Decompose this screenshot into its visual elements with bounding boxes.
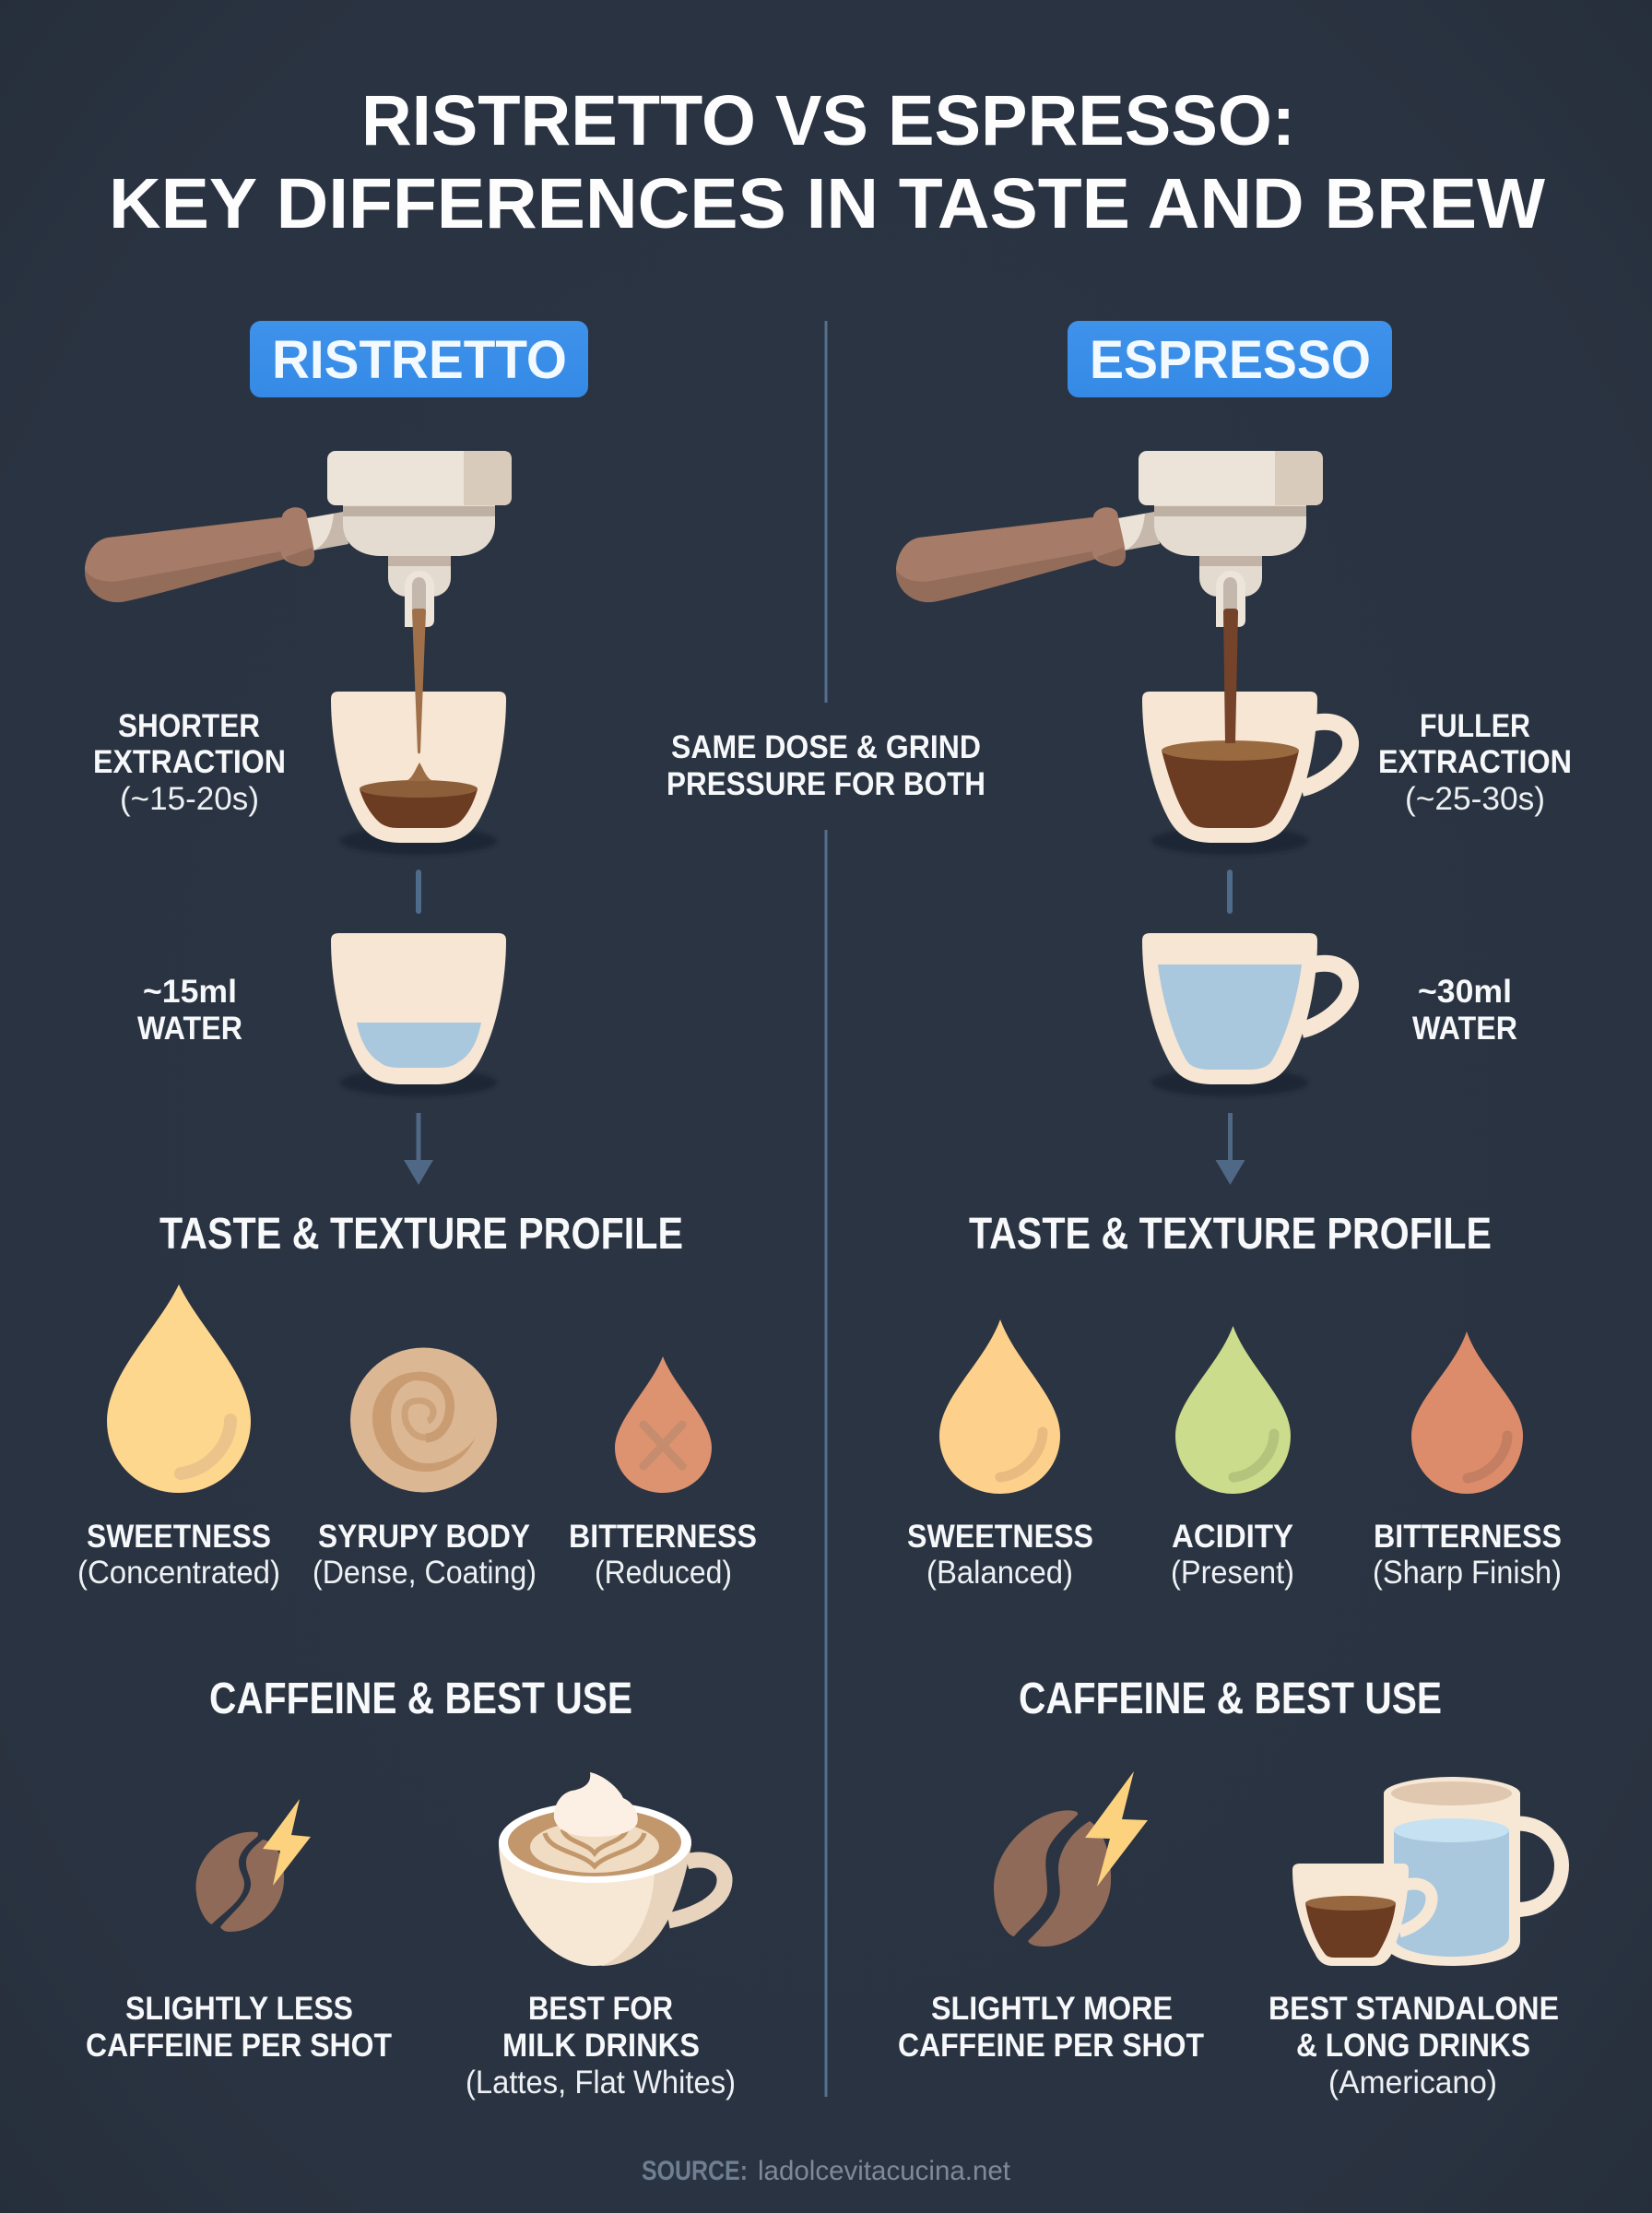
- icon: latte cup: [499, 1772, 725, 1966]
- label: more caffeine: SLIGHTLY MORE: [931, 1991, 1173, 2027]
- center note: same dose and grind: [667, 729, 985, 802]
- label: 15ml water: ~15ml: [143, 974, 237, 1010]
- icon: portafilter: [85, 451, 512, 627]
- title: RISTRETTO VS ESPRESSO:: [361, 81, 1295, 160]
- label: acidity: (Present): [1171, 1555, 1294, 1591]
- label: fuller extraction: (~25-30s): [1405, 781, 1545, 817]
- label: bitterness: BITTERNESS: [569, 1519, 757, 1555]
- heading: caffeine and best use: CAFFEINE & BEST USE: [209, 1675, 632, 1723]
- source line: ladolcevitacucina.net: [758, 2156, 1011, 2186]
- icon: bitterness drop reduced: [615, 1356, 712, 1493]
- heading pill: espresso: ESPRESSO: [1090, 330, 1371, 390]
- label: best standalone: (Americano): [1328, 2065, 1497, 2101]
- label: acidity: [1171, 1519, 1294, 1591]
- panel: ristretto: [77, 321, 757, 2101]
- source line: [642, 2156, 1011, 2186]
- label: sweetness: [907, 1519, 1093, 1591]
- icon: espresso shot stream: [1223, 609, 1238, 743]
- icon: sweetness drop: [107, 1284, 251, 1493]
- label: shorter extraction: EXTRACTION: [93, 744, 286, 780]
- label: 30ml water: ~30ml: [1418, 974, 1512, 1010]
- label: best standalone: BEST STANDALONE: [1268, 1991, 1559, 2027]
- icon: standalone cup and long drink mug: [1292, 1777, 1562, 1966]
- heading: caffeine and best use: CAFFEINE & BEST USE: [1019, 1675, 1442, 1723]
- label: more caffeine: CAFFEINE PER SHOT: [898, 2028, 1204, 2064]
- icon: bean with bolt: [994, 1771, 1148, 1947]
- label: syrupy body: (Dense, Coating): [313, 1555, 537, 1591]
- arrow: [1215, 1113, 1245, 1185]
- icon: espresso cup with shot: [1142, 692, 1351, 855]
- heading: taste and texture: TASTE & TEXTURE PROFILE: [969, 1210, 1492, 1259]
- label: 30ml water: [1412, 974, 1517, 1047]
- icon: bitterness drop: [1411, 1331, 1523, 1494]
- label: less caffeine: SLIGHTLY LESS: [125, 1991, 353, 2027]
- label: sweetness: [77, 1519, 280, 1591]
- label: less caffeine: [86, 1991, 392, 2064]
- label: best for milk drinks: [466, 1991, 736, 2101]
- center note: same dose and grind: SAME DOSE & GRIND: [671, 729, 981, 765]
- title: [109, 81, 1545, 243]
- label: shorter extraction: [93, 708, 286, 817]
- icon: ristretto water cup: [331, 933, 506, 1096]
- center note: same dose and grind: PRESSURE FOR BOTH: [667, 766, 985, 802]
- label: bitterness: [1373, 1519, 1562, 1591]
- label: fuller extraction: EXTRACTION: [1378, 744, 1572, 780]
- icon: sweetness drop: [939, 1320, 1060, 1494]
- icon: acidity drop: [1175, 1326, 1291, 1494]
- label: shorter extraction: (~15-20s): [120, 781, 259, 817]
- heading pill: ristretto: [250, 321, 588, 397]
- icon: ristretto shot stream: [412, 609, 426, 754]
- label: best for milk drinks: (Lattes, Flat Whites): [466, 2065, 736, 2101]
- label: bitterness: (Sharp Finish): [1373, 1555, 1562, 1591]
- label: shorter extraction: SHORTER: [118, 708, 260, 744]
- label: best for milk drinks: MILK DRINKS: [502, 2028, 700, 2064]
- label: more caffeine: [898, 1991, 1204, 2064]
- icon: bean with bolt: [195, 1799, 311, 1932]
- label: acidity: ACIDITY: [1172, 1519, 1293, 1555]
- label: fuller extraction: FULLER: [1420, 708, 1530, 744]
- label: bitterness: BITTERNESS: [1374, 1519, 1562, 1555]
- center divider: [824, 321, 828, 2097]
- icon: syrupy body swirl: [350, 1348, 497, 1492]
- panel: espresso: [896, 321, 1572, 2101]
- label: syrupy body: [313, 1519, 537, 1591]
- label: bitterness: [569, 1519, 757, 1591]
- connector: [416, 870, 421, 914]
- icon: espresso water cup: [1142, 933, 1351, 1096]
- label: sweetness: (Balanced): [926, 1555, 1073, 1591]
- label: sweetness: (Concentrated): [77, 1555, 280, 1591]
- icon: ristretto cup with shot: [331, 692, 506, 855]
- heading pill: ristretto: RISTRETTO: [272, 330, 567, 390]
- label: less caffeine: CAFFEINE PER SHOT: [86, 2028, 392, 2064]
- label: sweetness: SWEETNESS: [907, 1519, 1093, 1555]
- label: sweetness: SWEETNESS: [87, 1519, 271, 1555]
- label: 15ml water: WATER: [137, 1011, 242, 1047]
- title: KEY DIFFERENCES IN TASTE AND BREW: [109, 164, 1545, 243]
- source line: SOURCE:: [642, 2156, 748, 2186]
- arrow: [404, 1113, 433, 1185]
- heading: taste and texture: TASTE & TEXTURE PROFILE: [159, 1210, 683, 1259]
- icon: portafilter: [896, 451, 1323, 627]
- label: 30ml water: WATER: [1412, 1011, 1517, 1047]
- label: 15ml water: [137, 974, 242, 1047]
- connector: [1227, 870, 1233, 914]
- label: bitterness: (Reduced): [595, 1555, 732, 1591]
- label: syrupy body: SYRUPY BODY: [318, 1519, 530, 1555]
- label: fuller extraction: [1378, 708, 1572, 817]
- label: best for milk drinks: BEST FOR: [528, 1991, 673, 2027]
- label: best standalone: & LONG DRINKS: [1296, 2028, 1530, 2064]
- label: best standalone: [1268, 1991, 1559, 2101]
